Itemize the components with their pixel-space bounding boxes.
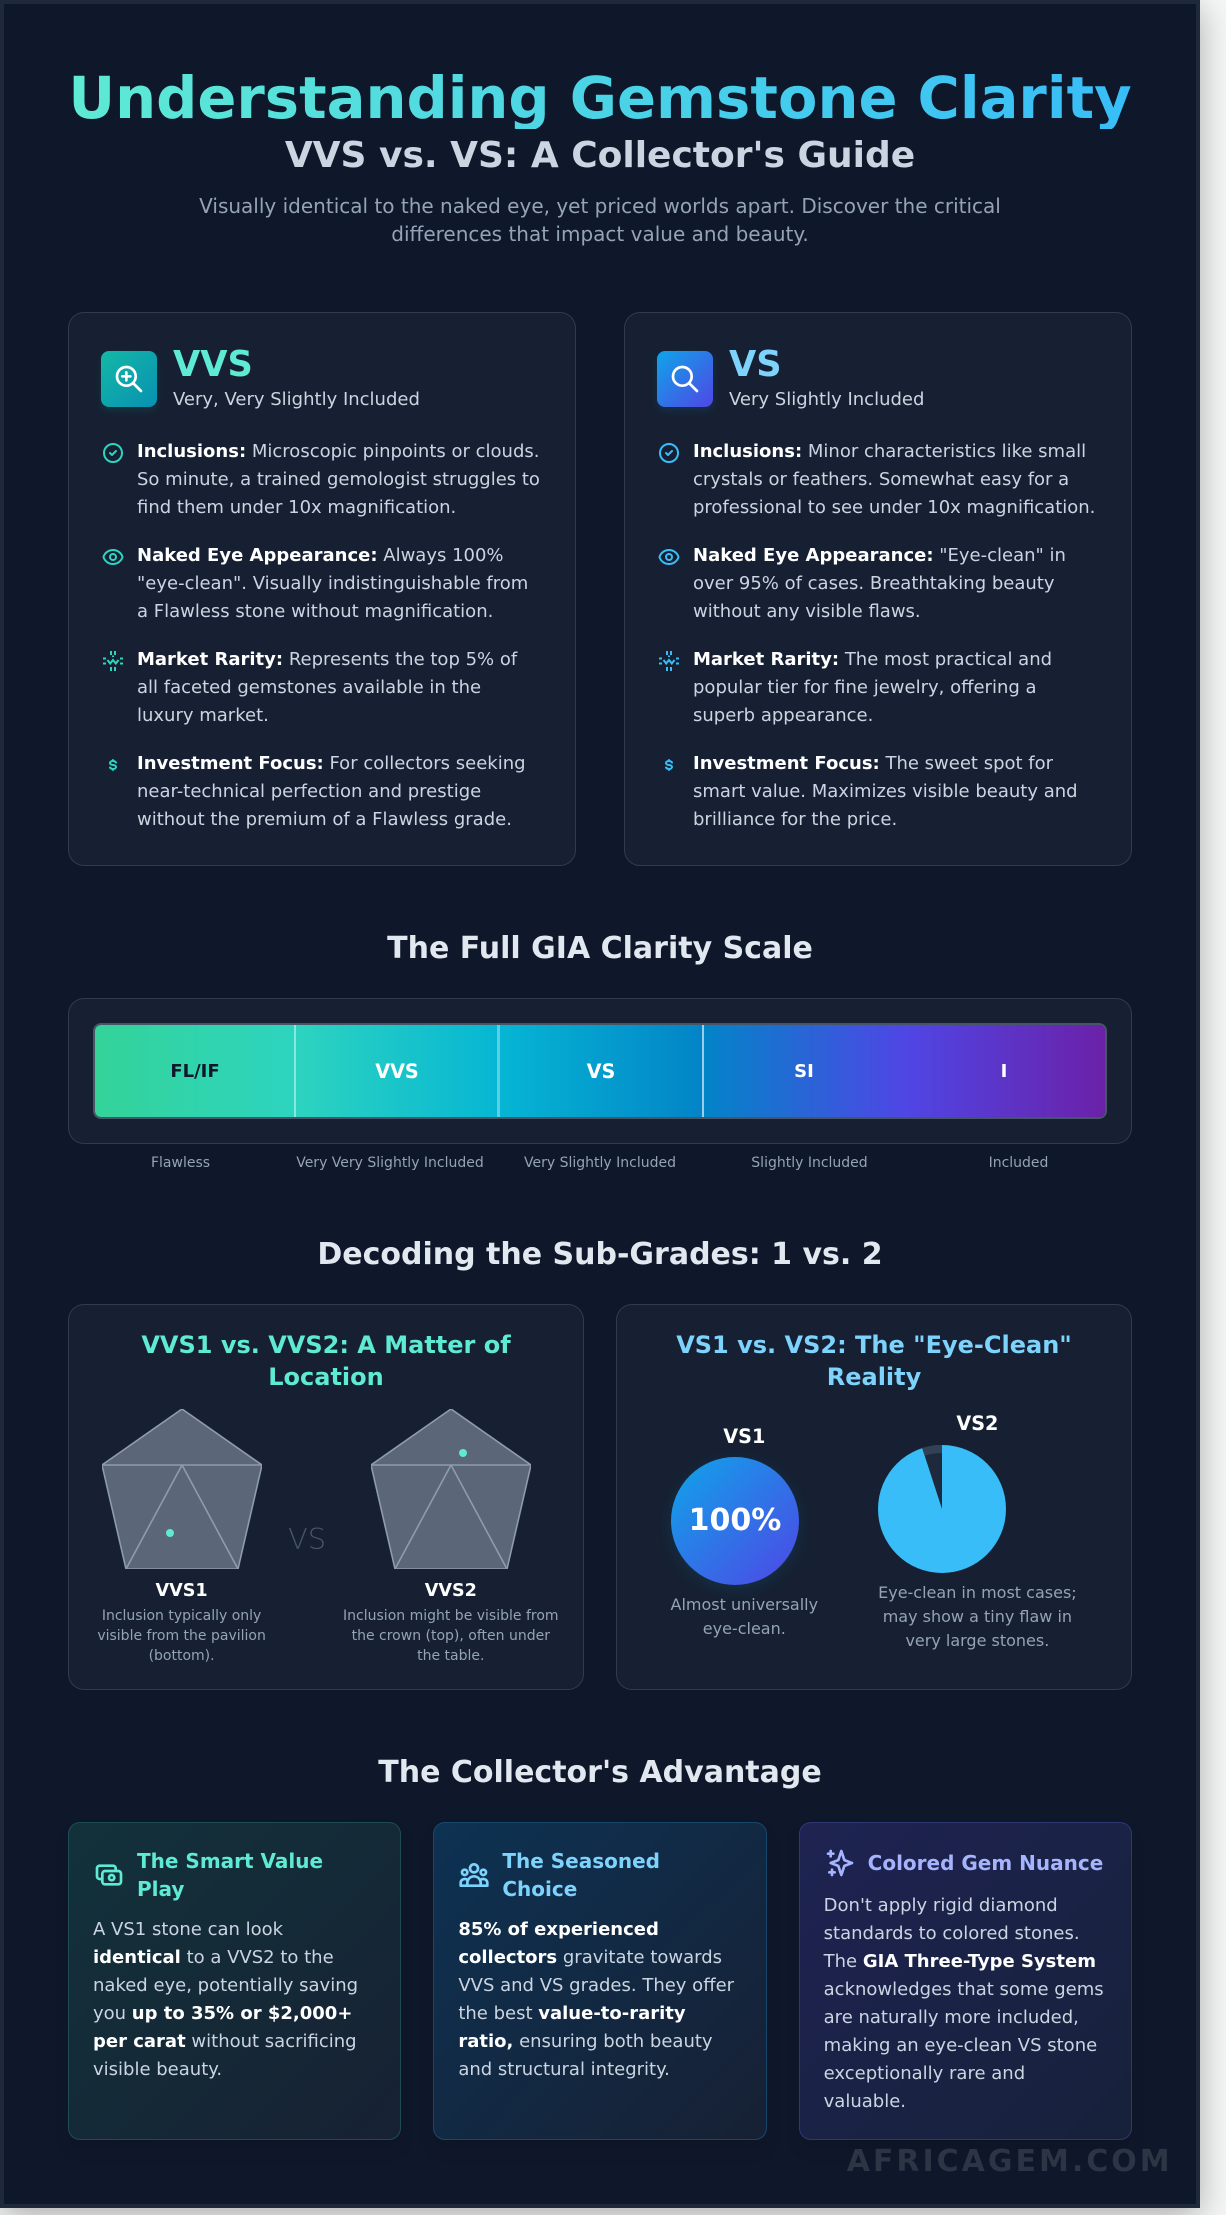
scale label: SI: Slightly Included (751, 1155, 868, 1171)
item: inclusions: Inclusions: Microscopic pinpoints or clouds. (137, 441, 539, 462)
label: VS: VS (587, 1060, 615, 1083)
card text: making an eye-clean VS stone (824, 2035, 1097, 2056)
item: naked eye appearance: Naked Eye Appearance: "Eye-clean" in (693, 545, 1066, 566)
card text: identical to a VVS2 to the (93, 1947, 334, 1968)
panel title (676, 1331, 1072, 1391)
label: VS1: VS1 (723, 1425, 765, 1448)
item: naked eye appearance: without any visible flaws. (693, 601, 921, 622)
item: market rarity (659, 649, 1052, 726)
diagram: VVS2 gem (371, 1409, 531, 1569)
item: inclusions (103, 441, 540, 518)
description: VS1: eye-clean. (703, 1619, 786, 1638)
chart: VS2 pie (878, 1445, 1006, 1573)
panel title: Reality (827, 1363, 921, 1391)
card text: are naturally more included, (824, 2007, 1079, 2028)
panel: VS1 vs VS2 (616, 1304, 1132, 1690)
item: inclusions: So minute, a trained gemologist struggles to (137, 469, 540, 490)
item: market rarity: popular tier for fine jewelry, offering a (693, 677, 1037, 698)
item: market rarity: Market Rarity: Represents the top 5% of (137, 649, 517, 670)
panel title: VS1 vs. VS2: The "Eye-Clean" (676, 1331, 1072, 1359)
scale label: I: Included (989, 1155, 1048, 1171)
card text (93, 1919, 358, 2080)
scale bar (93, 1023, 1107, 1119)
title: Understanding Gemstone Clarity (68, 65, 1132, 132)
description: VS2: may show a tiny flaw in (883, 1607, 1072, 1626)
card text: The GIA Three-Type System (824, 1951, 1096, 1972)
card title: Choice (502, 1877, 577, 1901)
segment: FL/IF (95, 1025, 295, 1117)
item: investment focus (665, 753, 1078, 830)
intro text: Visually identical to the naked eye, yet priced worlds apart. Discover the critical (199, 194, 1001, 218)
description: VVS2 (343, 1608, 559, 1664)
description: VVS1 (97, 1608, 266, 1664)
item: naked eye appearance: "eye-clean". Visually indistinguishable from (137, 573, 528, 594)
card text: per carat without sacrificing (93, 2031, 357, 2052)
card text: valuable. (824, 2091, 906, 2112)
card: seasoned choice (433, 1822, 767, 2140)
item: market rarity (103, 649, 518, 726)
panel title: Location (268, 1363, 384, 1391)
label: I: I (1001, 1061, 1007, 1082)
description: VS2 (878, 1583, 1077, 1650)
card text: Don't apply rigid diamond (824, 1895, 1058, 1916)
card text: acknowledges that some gems (824, 1979, 1104, 2000)
segment: SI (703, 1025, 905, 1117)
item: investment focus: brilliance for the price. (693, 809, 897, 830)
label: FL/IF: FL/IF (170, 1061, 220, 1082)
card text: the best value-to-rarity (458, 2003, 686, 2024)
panel title (141, 1331, 511, 1391)
card text: and structural integrity. (458, 2059, 670, 2080)
label: VVS2: VVS2 (425, 1581, 477, 1601)
heading: VS: VS (729, 344, 782, 385)
panel: VS (624, 312, 1132, 866)
card text (458, 1919, 734, 2080)
description: VS1 (670, 1595, 818, 1638)
heading: clarity scale: The Full GIA Clarity Scale (387, 931, 813, 966)
scale label: VS: Very Slightly Included (524, 1155, 676, 1171)
label: VVS1: VVS1 (156, 1581, 208, 1601)
heading: sub-grades: Decoding the Sub-Grades: 1 vs. 2 (317, 1237, 883, 1272)
item: market rarity: Market Rarity: The most practical and (693, 649, 1052, 670)
card title: The Seasoned (502, 1849, 660, 1873)
description: VVS1: Inclusion typically only (102, 1608, 261, 1624)
subtitle: VVS vs. VS: A Collector's Guide (285, 135, 915, 176)
subheading: Very Slightly Included (729, 389, 924, 410)
card text: naked eye, potentially saving (93, 1975, 358, 1996)
description: VS2: very large stones. (905, 1631, 1049, 1650)
segment: VVS (295, 1025, 499, 1117)
card title: The Smart Value (137, 1849, 323, 1873)
description: VVS1: (bottom). (149, 1648, 215, 1664)
label: VS2: VS2 (956, 1412, 998, 1435)
item: inclusions (659, 441, 1095, 518)
diagram: VVS1 gem (102, 1409, 262, 1569)
card text: 85% of experienced (458, 1919, 659, 1940)
description: VS1: Almost universally (670, 1595, 818, 1614)
item: market rarity: all faceted gemstones available in the (137, 677, 481, 698)
intro text: differences that impact value and beauty. (391, 222, 809, 246)
description: VVS2: the crown (top), often under (352, 1628, 550, 1644)
card text: visible beauty. (93, 2059, 222, 2080)
description: VS2: Eye-clean in most cases; (878, 1583, 1077, 1602)
item: naked eye appearance (102, 545, 528, 622)
card text: A VS1 stone can look (93, 1919, 283, 1940)
panel: VVS1 vs VVS2 (68, 1304, 584, 1690)
item: inclusions: find them under 10x magnification. (137, 497, 456, 518)
panel: VVS (68, 312, 576, 866)
heading: VVS: VVS (173, 344, 253, 385)
item: naked eye appearance: over 95% of cases. Breathtaking beauty (693, 573, 1055, 594)
item: market rarity: superb appearance. (693, 705, 873, 726)
description: VVS2: the table. (417, 1648, 484, 1664)
item: naked eye appearance: Naked Eye Appearance: Always 100% (137, 545, 504, 566)
label: SI: SI (794, 1061, 814, 1082)
card title (502, 1849, 660, 1901)
item: investment focus: smart value. Maximizes visible beauty and (693, 781, 1078, 802)
item: investment focus: near-technical perfection and prestige (137, 781, 481, 802)
heading: collector's advantage: The Collector's Advantage (378, 1755, 822, 1790)
icon: users (459, 1863, 489, 1887)
item: naked eye appearance: a Flawless stone without magnification. (137, 601, 493, 622)
panel title: VVS1 vs. VVS2: A Matter of (141, 1331, 511, 1359)
segment: VS (499, 1025, 703, 1117)
item: investment focus: Investment Focus: For collectors seeking (137, 753, 526, 774)
icon: magnifier (657, 351, 713, 407)
intro text (199, 194, 1001, 246)
card text: ratio, ensuring both beauty (458, 2031, 713, 2052)
scale label: VVS: Very Very Slightly Included (296, 1155, 484, 1171)
icon: sparkles (826, 1850, 854, 1876)
panel: clarity scale (68, 998, 1132, 1144)
card text: collectors gravitate towards (458, 1947, 722, 1968)
icon: magnifier plus (101, 351, 157, 407)
card: smart value play (68, 1822, 401, 2140)
chart: VS1 100% circle (671, 1457, 799, 1585)
item: inclusions: crystals or feathers. Somewhat easy for a (693, 469, 1069, 490)
label: VVS: VVS (375, 1060, 419, 1083)
item: investment focus: without the premium of a Flawless grade. (137, 809, 512, 830)
watermark: AFRICAGEM.COM (847, 2144, 1173, 2179)
card: colored gem nuance (799, 1822, 1132, 2140)
card text: standards to colored stones. (824, 1923, 1080, 1944)
value: 100%: 100% (689, 1503, 781, 1538)
scale label: Flawless: Flawless (151, 1155, 210, 1171)
item: inclusions: Inclusions: Minor characteristics like small (693, 441, 1086, 462)
icon: cash (96, 1864, 122, 1886)
VS separator: VS (288, 1522, 326, 1556)
card title (137, 1849, 323, 1901)
item: market rarity: luxury market. (137, 705, 269, 726)
item: investment focus (109, 753, 526, 830)
card title: Colored Gem Nuance (868, 1851, 1103, 1875)
subheading: Very, Very Slightly Included (173, 389, 420, 410)
card text: exceptionally rare and (824, 2063, 1025, 2084)
description: VVS1: visible from the pavilion (97, 1628, 266, 1644)
card text: you up to 35% or $2,000+ (93, 2003, 352, 2024)
card text (824, 1895, 1104, 2112)
card title: Play (137, 1877, 184, 1901)
card text: VVS and VS grades. They offer (458, 1975, 734, 1996)
item: investment focus: Investment Focus: The sweet spot for (693, 753, 1053, 774)
item: naked eye appearance (658, 545, 1066, 622)
segment: I (905, 1025, 1105, 1117)
item: inclusions: professional to see under 10x magnification. (693, 497, 1095, 518)
description: VVS2: Inclusion might be visible from (343, 1608, 559, 1624)
